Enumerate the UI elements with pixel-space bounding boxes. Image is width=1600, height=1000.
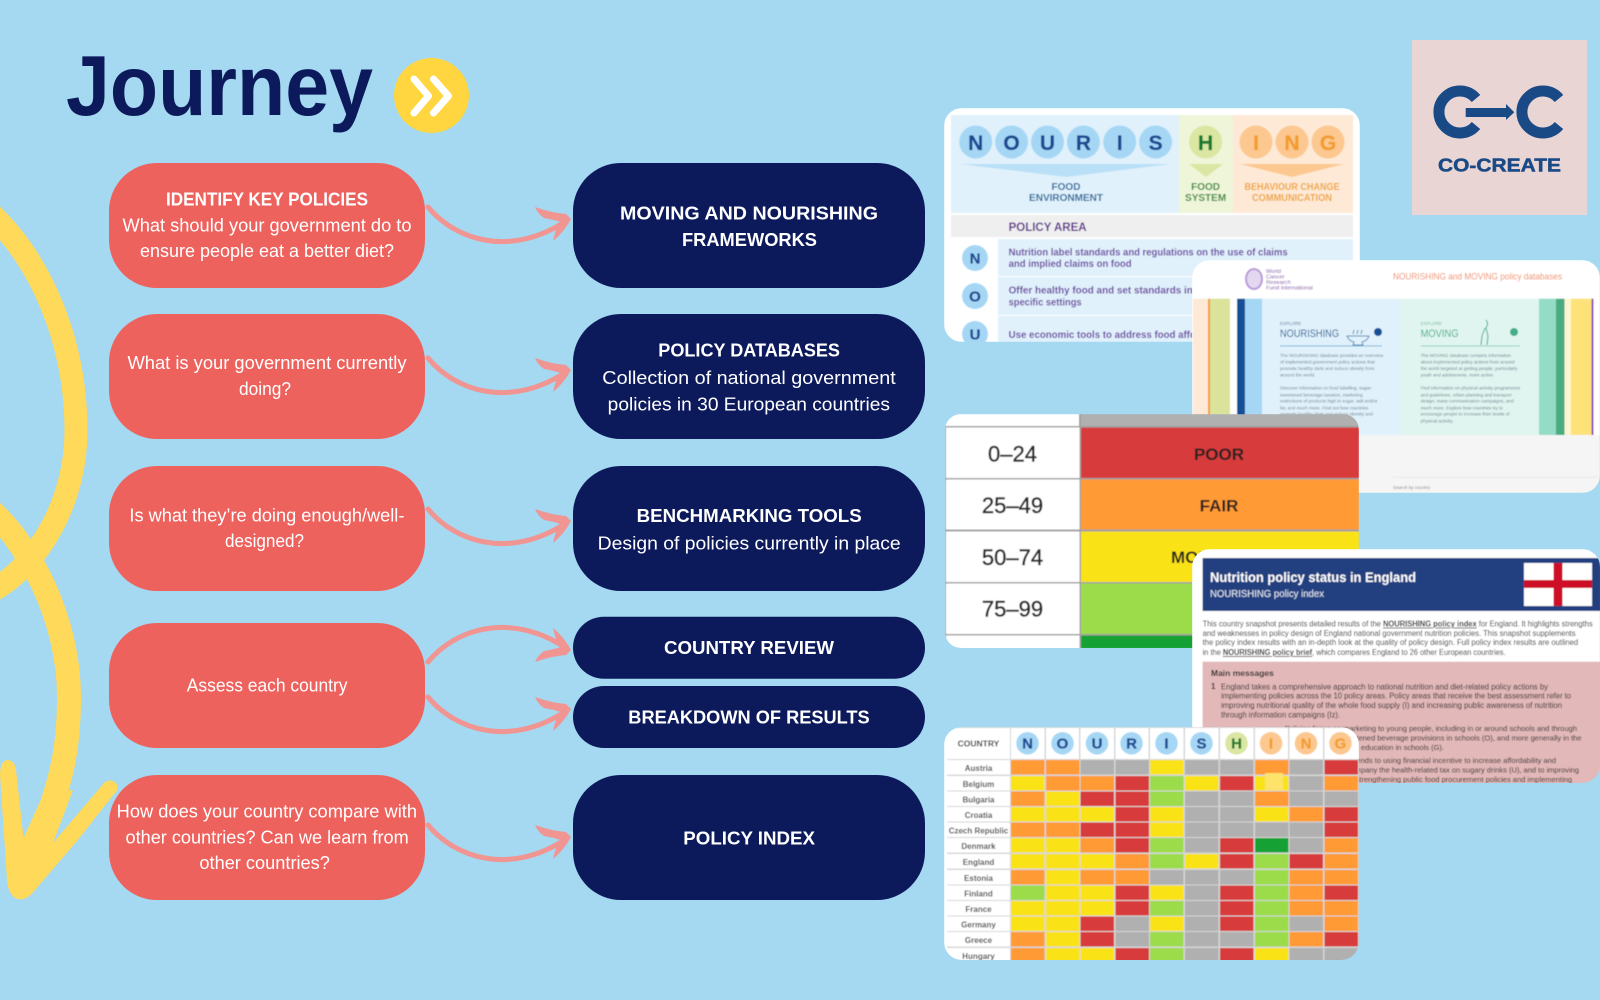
panel: NOURISHING policy index heatmap [944, 727, 1359, 962]
panel: policy databases website: EXPLORE [1421, 321, 1442, 326]
panel: NOURISHING framework: SYSTEM [1185, 193, 1226, 204]
panel: England country snapshot: This country snapshot presents detailed results of the NOURISHING policy index for England. It highlights strengths [1203, 620, 1593, 628]
heatmap header [947, 728, 1359, 759]
panel: policy databases website: World [1266, 269, 1281, 275]
heatmap header: R [1126, 736, 1137, 752]
panel: policy databases website: Research [1266, 280, 1291, 286]
step 2: current action: doing? [239, 379, 291, 399]
benchmarking tools: BENCHMARKING TOOLS [637, 506, 862, 526]
panel: England country snapshot: Main messages [1211, 668, 1274, 678]
panel: NOURISHING framework: I [1117, 132, 1123, 155]
panel: England country snapshot: implementing policies across the 10 policy areas. Policy areas that receive the best assessment refer to [1221, 692, 1572, 701]
heatmap header: U [1092, 736, 1102, 752]
panel: NOURISHING framework: N [1284, 132, 1300, 155]
panel: England country snapshot: Nutrition policy status in England [1210, 569, 1416, 585]
arrow: step 4 to breakdown [428, 697, 571, 732]
step 5: compare countries [109, 775, 425, 900]
arrow: step 1 to frameworks [428, 207, 571, 242]
panel: England country snapshot: strengthening public food procurement policies and implementing [1356, 775, 1572, 784]
policy index: POLICY INDEX [683, 828, 815, 848]
step 1: identify key policies: ensure people eat a better diet? [140, 241, 394, 261]
panel: NOURISHING framework: Nutrition label standards and regulations on the use of claims [1009, 248, 1288, 258]
panel: NOURISHING framework [944, 108, 1360, 347]
framework: moving and nourishing: MOVING AND NOURISHING [620, 203, 878, 223]
step 5: compare countries: other countries? [199, 853, 330, 873]
panel: policy databases website: physical activity. [1421, 418, 1453, 423]
panel: NOURISHING framework: BEHAVIOUR CHANGE [1244, 182, 1340, 193]
panel: England country snapshot: 1 [1211, 682, 1216, 691]
panel: NOURISHING framework: Use economic tools to address food affordability [1009, 330, 1234, 341]
arrow: step 2 to databases [428, 358, 571, 393]
panel: England country snapshot: through information campaigns (Iz). [1221, 711, 1340, 720]
panel: policy databases website: Discover information on food labelling, sugar- [1280, 386, 1373, 391]
title: Journey [66, 39, 373, 134]
panel: policy databases website: design, mass communication campaigns, and [1421, 399, 1514, 404]
panel: NOURISHING framework: U [1040, 132, 1055, 155]
step 5: compare countries: other countries? Can we learn from [126, 828, 409, 848]
policy databases [573, 314, 925, 439]
panel: England country snapshot: in the NOURISHING policy brief, which compares England to 26 other European countries. [1203, 648, 1506, 657]
heatmap header: COUNTRY [958, 738, 1000, 748]
heatmap country names: Greece [965, 936, 993, 945]
panel: NOURISHING framework: U [970, 326, 980, 344]
panel: score legend [945, 414, 1359, 648]
panel: score legend: MODERATE [1171, 548, 1267, 567]
logo: co-create: CO-CREATE [1438, 155, 1561, 176]
panel: policy databases website: encourage people to increase their levels of [1421, 412, 1510, 417]
panel: policy databases website: around the world. [1280, 373, 1316, 378]
panel: England country snapshot: Action extends to using financial incentive to increase affordability and [1323, 756, 1556, 765]
step 3: adequacy: designed? [225, 531, 304, 551]
panel: policy databases website: promote healthy diets and reduce obesity from [1280, 366, 1375, 371]
policy databases: policies in 30 European countries [608, 395, 890, 415]
panel: England country snapshot: accompany the health-related tax on sugary drinks (U), and to improving [1339, 766, 1579, 774]
panel: England country snapshot: and weaknesses in policy design of England national government nutrition policies. This snapshot supplements [1203, 629, 1576, 638]
panel: score legend: 0–24 [988, 442, 1037, 466]
heatmap cells [1011, 760, 1358, 962]
heatmap header: N [1301, 736, 1311, 752]
panel: policy databases website: and guidelines, urban planning and transport [1421, 392, 1512, 397]
panel: NOURISHING framework: O [1003, 132, 1020, 155]
heatmap header: I [1269, 736, 1273, 752]
benchmarking tools: Design of policies currently in place [598, 533, 901, 553]
icon: double chevron [394, 58, 469, 133]
panel: NOURISHING framework: ENVIRONMENT [1029, 193, 1103, 204]
panel: NOURISHING framework: H [1198, 132, 1213, 155]
step 3: adequacy [109, 466, 425, 591]
policy index [573, 775, 925, 900]
panel: NOURISHING framework: specific settings [1009, 298, 1082, 308]
heatmap country names: Belgium [963, 780, 994, 789]
step 2: current action [109, 314, 425, 439]
heatmap country names: Czech Republic [949, 826, 1009, 836]
step 4: assess each country [109, 623, 425, 748]
benchmarking tools [573, 466, 925, 591]
country review: COUNTRY REVIEW [664, 638, 834, 658]
heatmap country names: Bulgaria [962, 796, 995, 804]
heatmap country names: England [963, 858, 994, 867]
panel: NOURISHING framework: POLICY AREA [1009, 222, 1087, 234]
panel: score legend: 25–49 [982, 493, 1043, 518]
panel: England country snapshot: restrictions on sweetened beverage provisions in schools (O), and more generally in the [1290, 734, 1582, 742]
panel: NOURISHING framework: I [1253, 132, 1259, 155]
panel: policy databases website: sweetened beverage taxation, marketing [1280, 392, 1363, 397]
panel: policy databases website: much more. Explore how countries try to [1421, 405, 1503, 410]
framework: moving and nourishing [573, 163, 925, 288]
panel: policy databases website: promote healthy diets and reduce obesity and [1280, 412, 1373, 417]
panel: England country snapshot: education in schools (G). [1361, 743, 1444, 752]
heatmap country names: France [965, 905, 992, 914]
heatmap header: S [1196, 736, 1207, 752]
heatmap country names: Denmark [961, 842, 996, 851]
heatmap header: G [1335, 736, 1346, 752]
panel: policy databases website: about implemented policy actions from around [1421, 360, 1515, 365]
arrow: step 3 to benchmarking [428, 509, 571, 544]
step 2: current action: What is your government currently [128, 353, 406, 373]
step 1: identify key policies: IDENTIFY KEY POLICIES [166, 190, 368, 210]
heatmap country names: Germany [961, 920, 996, 930]
heatmap country names: Austria [965, 764, 993, 773]
heatmap header: H [1231, 736, 1242, 752]
panel: NOURISHING framework: S [1149, 132, 1163, 155]
panel: NOURISHING framework: G [1320, 132, 1336, 155]
panel: score legend: 50–74 [982, 545, 1043, 570]
step 1: identify key policies: What should your government do to [122, 216, 412, 236]
panel: policy databases website: Fund International [1266, 286, 1313, 292]
heatmap country names: Estonia [964, 874, 993, 883]
panel: NOURISHING framework: and implied claims on food [1009, 259, 1132, 270]
panel: NOURISHING framework: FOOD [1191, 182, 1220, 193]
panel: NOURISHING framework: Offer healthy food and set standards in public institutions and other [1009, 286, 1329, 296]
panel: policy databases website: the world targeted at getting people, particularly [1421, 366, 1518, 371]
panel: score legend: POOR [1194, 445, 1244, 464]
panel: policy databases website: EXPLORE [1280, 321, 1301, 326]
policy databases: Collection of national government [602, 368, 896, 388]
panel: NOURISHING framework: N [968, 132, 983, 155]
panel: NOURISHING framework: N [970, 250, 980, 268]
heatmap country names: Hungary [962, 952, 995, 961]
country review [573, 617, 925, 679]
step 1: identify key policies [109, 163, 425, 288]
panel: policy databases website: The NOURISHING database provides an overview [1280, 353, 1384, 358]
panel: NOURISHING framework: COMMUNICATION [1252, 193, 1332, 204]
panel: policy databases website: NOURISHING and MOVING policy databases [1393, 272, 1562, 282]
panel: England country snapshot: Policies focus on marketing to young people, including in or around schools and through [1285, 724, 1577, 733]
panel: policy databases website: fat, and much more. Find out how countries [1280, 405, 1369, 410]
panel: score legend: 75–99 [982, 596, 1043, 622]
panel: England country snapshot: improving nutritional quality of the whole food supply (I) and increasing public awareness of nutrition [1221, 701, 1562, 710]
policy databases: POLICY DATABASES [658, 341, 840, 361]
step 3: adequacy: Is what they’re doing enough/well- [129, 506, 404, 526]
panel: policy databases website [1192, 260, 1600, 493]
breakdown of results [573, 686, 925, 748]
panel: policy databases website: Find information on physical activity programmes [1421, 386, 1521, 391]
panel: policy databases website: restrictions of products high in sugar, salt and/or [1280, 399, 1378, 404]
panel: NOURISHING framework: R [1076, 132, 1091, 155]
breakdown of results: BREAKDOWN OF RESULTS [628, 708, 870, 728]
panel: policy databases website: The MOVING database contains information [1421, 353, 1511, 358]
panel: policy databases website: youth and adolescents, more active. [1421, 373, 1494, 378]
heatmap country names [947, 760, 1010, 962]
heatmap header: O [1057, 736, 1069, 752]
heatmap country names: Finland [964, 890, 993, 898]
step 4: assess each country: Assess each country [187, 676, 348, 696]
framework: moving and nourishing: FRAMEWORKS [682, 230, 817, 250]
heatmap country names: Croatia [965, 811, 993, 820]
panel: NOURISHING framework: O [969, 288, 981, 306]
panel: England country snapshot: the policy index results with an in-depth look at the quality of policy design. Full policy index results are outlined [1203, 638, 1578, 647]
panel: policy databases website: NOURISHING [1280, 328, 1339, 340]
panel: England country snapshot [1192, 549, 1600, 784]
heatmap header: I [1164, 736, 1169, 752]
arrow: step 4 to country review [428, 627, 571, 662]
panel: policy databases website: Cancer [1266, 274, 1285, 280]
logo: co-create [1412, 40, 1587, 215]
panel: policy databases website: MOVING [1421, 328, 1459, 340]
panel: England country snapshot: England takes a comprehensive approach to national nutrition and diet-related policy actions by [1221, 682, 1548, 692]
panel: England country snapshot: NOURISHING policy index [1210, 588, 1325, 600]
panel: policy databases website: of implemented government policy actions that [1280, 360, 1375, 365]
panel: score legend: FAIR [1200, 496, 1238, 516]
panel: NOURISHING framework: FOOD [1052, 182, 1080, 193]
arrow: step 5 to policy index [428, 825, 571, 860]
heatmap header: N [1022, 736, 1033, 752]
panel: policy databases website: Search by country [1393, 485, 1431, 490]
step 5: compare countries: How does your country compare with [117, 802, 417, 822]
yellow journey arrow [0, 213, 118, 899]
